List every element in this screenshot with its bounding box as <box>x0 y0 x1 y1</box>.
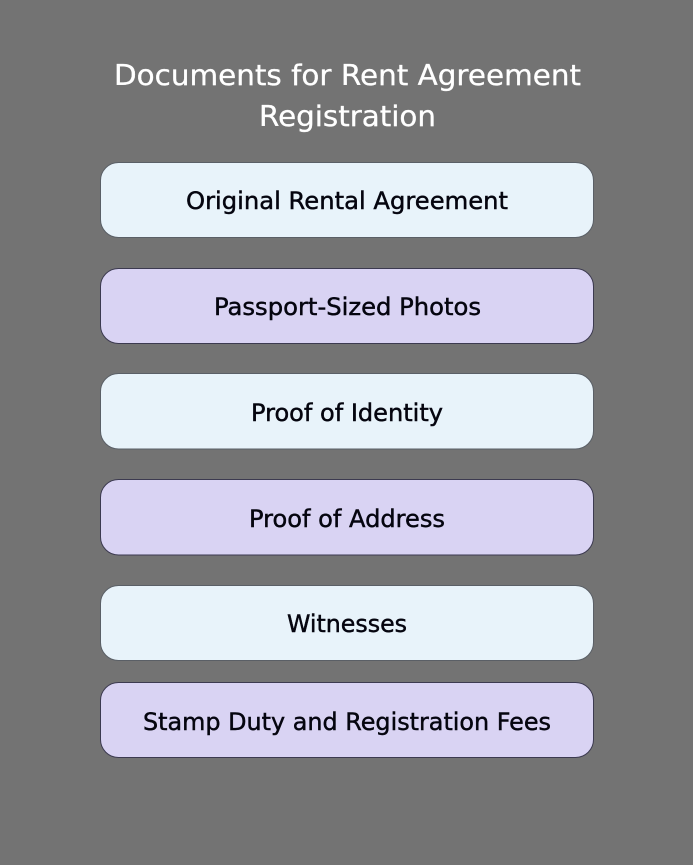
panel: Original Rental Agreement: Original Rental Agreement <box>186 187 508 215</box>
panel: Proof of Address: Proof of Address <box>249 505 445 533</box>
panel: Stamp Duty and Registration Fees: Stamp Duty and Registration Fees <box>143 708 551 736</box>
panel: Proof of Identity <box>100 374 594 449</box>
panel: Passport-Sized Photos: Passport-Sized Photos <box>214 293 481 321</box>
panel: Proof of Identity: Proof of Identity <box>251 399 443 427</box>
panel: Witnesses <box>100 586 594 660</box>
title <box>114 59 581 133</box>
title: Documents for Rent Agreement <box>114 59 581 92</box>
panel: Stamp Duty and Registration Fees <box>100 682 594 758</box>
panel: Proof of Address <box>100 480 594 555</box>
title: Registration <box>259 100 436 133</box>
panel: Original Rental Agreement <box>100 162 594 238</box>
panel: Passport-Sized Photos <box>100 268 594 344</box>
panel: Witnesses: Witnesses <box>287 610 407 638</box>
